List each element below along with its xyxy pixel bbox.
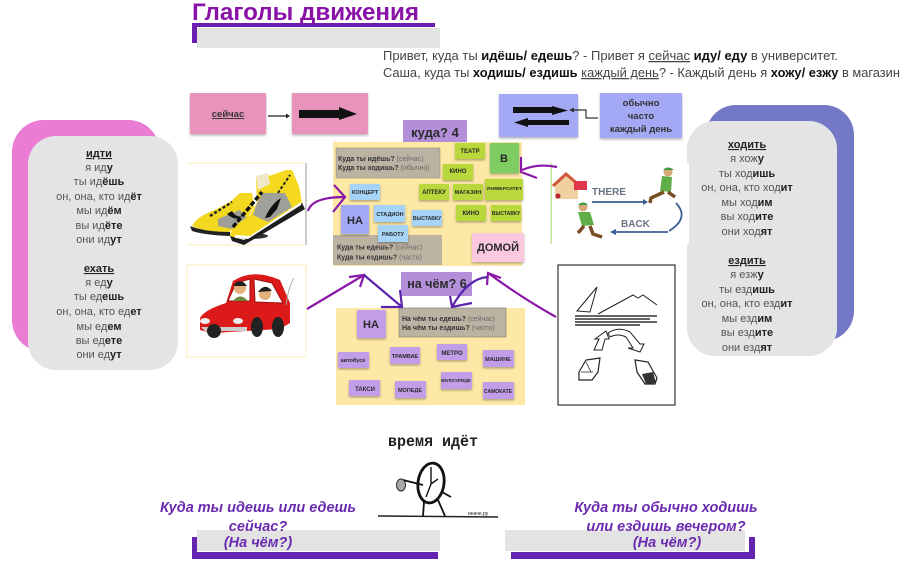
notes: blue НА group: СТАДИОН — [376, 212, 404, 218]
notes: green В group — [419, 143, 523, 221]
notes: blue НА group: РАБОТУ — [382, 232, 405, 238]
notes: transport: ВЕЛОСИПЕДЕ — [441, 378, 471, 383]
text: right question: (На чём?) — [633, 535, 701, 551]
panel: ходить ездить: я хожу — [730, 153, 765, 165]
notes: green В group: КИНО — [450, 169, 467, 175]
notes: blue НА group: КОНЦЕРТ — [352, 190, 379, 196]
panel: ходить ездить: мы ходим — [721, 197, 773, 209]
notes: blue НА group — [341, 184, 442, 242]
panel: ходить ездить — [687, 105, 854, 356]
arrow: car top to на чём board — [364, 275, 402, 307]
image: время идёт clock: время идёт — [388, 433, 478, 451]
note: обычно часто каждый день: часто — [628, 111, 654, 122]
question box: идёшь ходишь: Куда ты идёшь? (сейчас) — [338, 155, 424, 163]
notes: transport: автобусе — [341, 357, 365, 364]
text: right question: Куда ты обычно ходишь — [574, 500, 758, 516]
text: left question — [160, 500, 356, 551]
notes: green В group: ТЕАТР — [460, 149, 480, 155]
panel: идти ехать: вы идёте — [76, 220, 122, 232]
panel: ходить ездить: ты ездишь — [719, 284, 775, 296]
notes: green В group: УНИВЕРСИТЕТ — [486, 186, 522, 192]
panel: идти ехать: идти — [86, 148, 112, 160]
image: время идёт clock — [378, 433, 498, 517]
image: yellow sneakers — [187, 163, 306, 245]
text: left question: (На чём?) — [224, 535, 292, 551]
panel: ходить ездить: вы ходите — [721, 211, 773, 223]
arrow: car to board — [307, 275, 364, 309]
panel: идти ехать: я еду — [85, 277, 114, 289]
panel: ходить ездить: он, она, кто ездит — [701, 298, 793, 310]
note: домой: ДОМОЙ — [477, 241, 519, 254]
notes: transport: МОПЕДЕ — [398, 388, 422, 394]
image: red car — [187, 265, 306, 357]
note: back and forth arrows — [499, 94, 578, 137]
question box: идёшь ходишь — [336, 148, 440, 178]
notes: transport: МЕТРО — [441, 351, 463, 357]
panel: идти ехать: ты едешь — [74, 291, 124, 303]
note: НА purple — [357, 310, 386, 338]
notes: blue НА group: НА — [347, 215, 363, 227]
panel: ходить ездить: я езжу — [730, 269, 765, 281]
arrow: board to на чём question — [450, 277, 488, 307]
text: right question — [574, 500, 758, 551]
text: left question: сейчас? — [229, 519, 287, 535]
panel: ходить ездить: ходить — [728, 139, 766, 151]
image: время идёт clock: иначе.ру — [468, 511, 489, 517]
dialogue text: Саша, куда ты ходишь/ ездишь каждый день? - Каждый день я хожу/ езжу в магазин — [383, 66, 900, 80]
notes: transport — [338, 344, 514, 399]
notes: green В group: ВЫСТАВКУ — [492, 211, 521, 217]
panel: идти ехать: они идут — [76, 234, 122, 246]
note: right arrow — [292, 93, 368, 134]
question box: едешь ездишь: Куда ты едешь? (сейчас) — [337, 244, 422, 252]
dialogue text: Привет, куда ты идёшь/ едешь ? - Привет я сейчас иду/ еду в университет. — [383, 49, 838, 63]
panel: идти ехать: мы идём — [76, 205, 122, 217]
note: сейчас — [190, 93, 266, 134]
notes: transport: САМОКАТЕ — [484, 389, 513, 395]
question box: на чём: На чём ты ездишь? (часто) — [402, 325, 495, 332]
note: обычно часто каждый день: каждый день — [610, 124, 672, 135]
note: куда? 4: куда? 4 — [411, 125, 460, 140]
note: на чём? 6 — [401, 272, 472, 296]
dialogue text — [383, 49, 900, 80]
question box: на чём: На чём ты едешь? (сейчас) — [402, 315, 495, 323]
notes: transport: ТАКСИ — [355, 387, 375, 393]
panel: идти ехать: он, она, кто идёт — [56, 191, 143, 203]
note: НА purple: НА — [363, 319, 379, 331]
arrow: there-and-back to board — [521, 157, 557, 178]
note: обычно часто каждый день: обычно — [623, 98, 660, 109]
panel: куда yellow board — [333, 142, 524, 266]
notes: transport: МАШИНЕ — [485, 357, 511, 363]
panel: на чём yellow board — [336, 308, 525, 405]
panel: идти ехать: он, она, кто едет — [56, 306, 142, 318]
arrow: sketch to board — [487, 273, 556, 317]
note: обычно часто каждый день — [600, 93, 682, 138]
panel: идти ехать: мы едем — [77, 321, 121, 333]
panel: ходить ездить: ездить — [728, 255, 766, 267]
notes: green В group: КИНО — [463, 211, 480, 217]
arrow: обычно to note — [569, 108, 598, 118]
bracket: right question — [505, 530, 755, 559]
panel: ходить ездить: ты ходишь — [719, 168, 775, 180]
panel: ходить ездить: вы ездите — [721, 327, 773, 339]
panel: идти ехать — [12, 120, 178, 370]
question box: идёшь ходишь: Куда ты ходишь? (обычно) — [338, 164, 430, 172]
image: there and back — [550, 163, 689, 244]
panel: ходить ездить: они ходят — [722, 226, 773, 238]
notes: blue НА group: ВЫСТАВКУ — [413, 216, 442, 222]
note: на чём? 6: на чём? 6 — [407, 277, 467, 291]
notes: transport: ТРАМВАЕ — [392, 354, 419, 360]
question box: едешь ездишь — [333, 235, 442, 265]
bracket: left question — [192, 530, 440, 559]
arrow: sneakers to board — [308, 185, 345, 212]
arrow: сейчас to note — [268, 114, 290, 118]
question box: едешь ездишь: Куда ты ездишь? (часто) — [337, 254, 422, 262]
panel: идти ехать: ты идёшь — [74, 176, 125, 188]
panel: идти ехать: они едут — [76, 349, 122, 361]
panel: ходить ездить: мы ездим — [722, 313, 772, 325]
notes: green В group: В — [500, 153, 508, 165]
image: there and back: BACK — [621, 219, 651, 230]
panel: идти ехать: вы едете — [76, 335, 122, 347]
notes: green В group: МАГАЗИН — [455, 190, 481, 196]
image: there and back: THERE — [592, 187, 626, 198]
panel: идти ехать: ехать — [84, 263, 114, 275]
panel: ходить ездить: он, она, кто ходит — [701, 182, 793, 194]
panel: ходить ездить: они ездят — [722, 342, 773, 354]
question box: на чём — [399, 308, 506, 337]
note: сейчас: сейчас — [212, 109, 244, 120]
image: sketch with cars and turn arrow — [558, 265, 675, 405]
text: right question: или ездишь вечером? — [586, 519, 746, 535]
note: куда? 4 — [403, 120, 467, 145]
panel: идти ехать: я иду — [85, 162, 114, 174]
notes: green В group: АПТЕКУ — [422, 190, 446, 196]
note: домой — [472, 233, 524, 262]
title — [192, 0, 440, 48]
text: left question: Куда ты идешь или едешь — [160, 500, 356, 516]
